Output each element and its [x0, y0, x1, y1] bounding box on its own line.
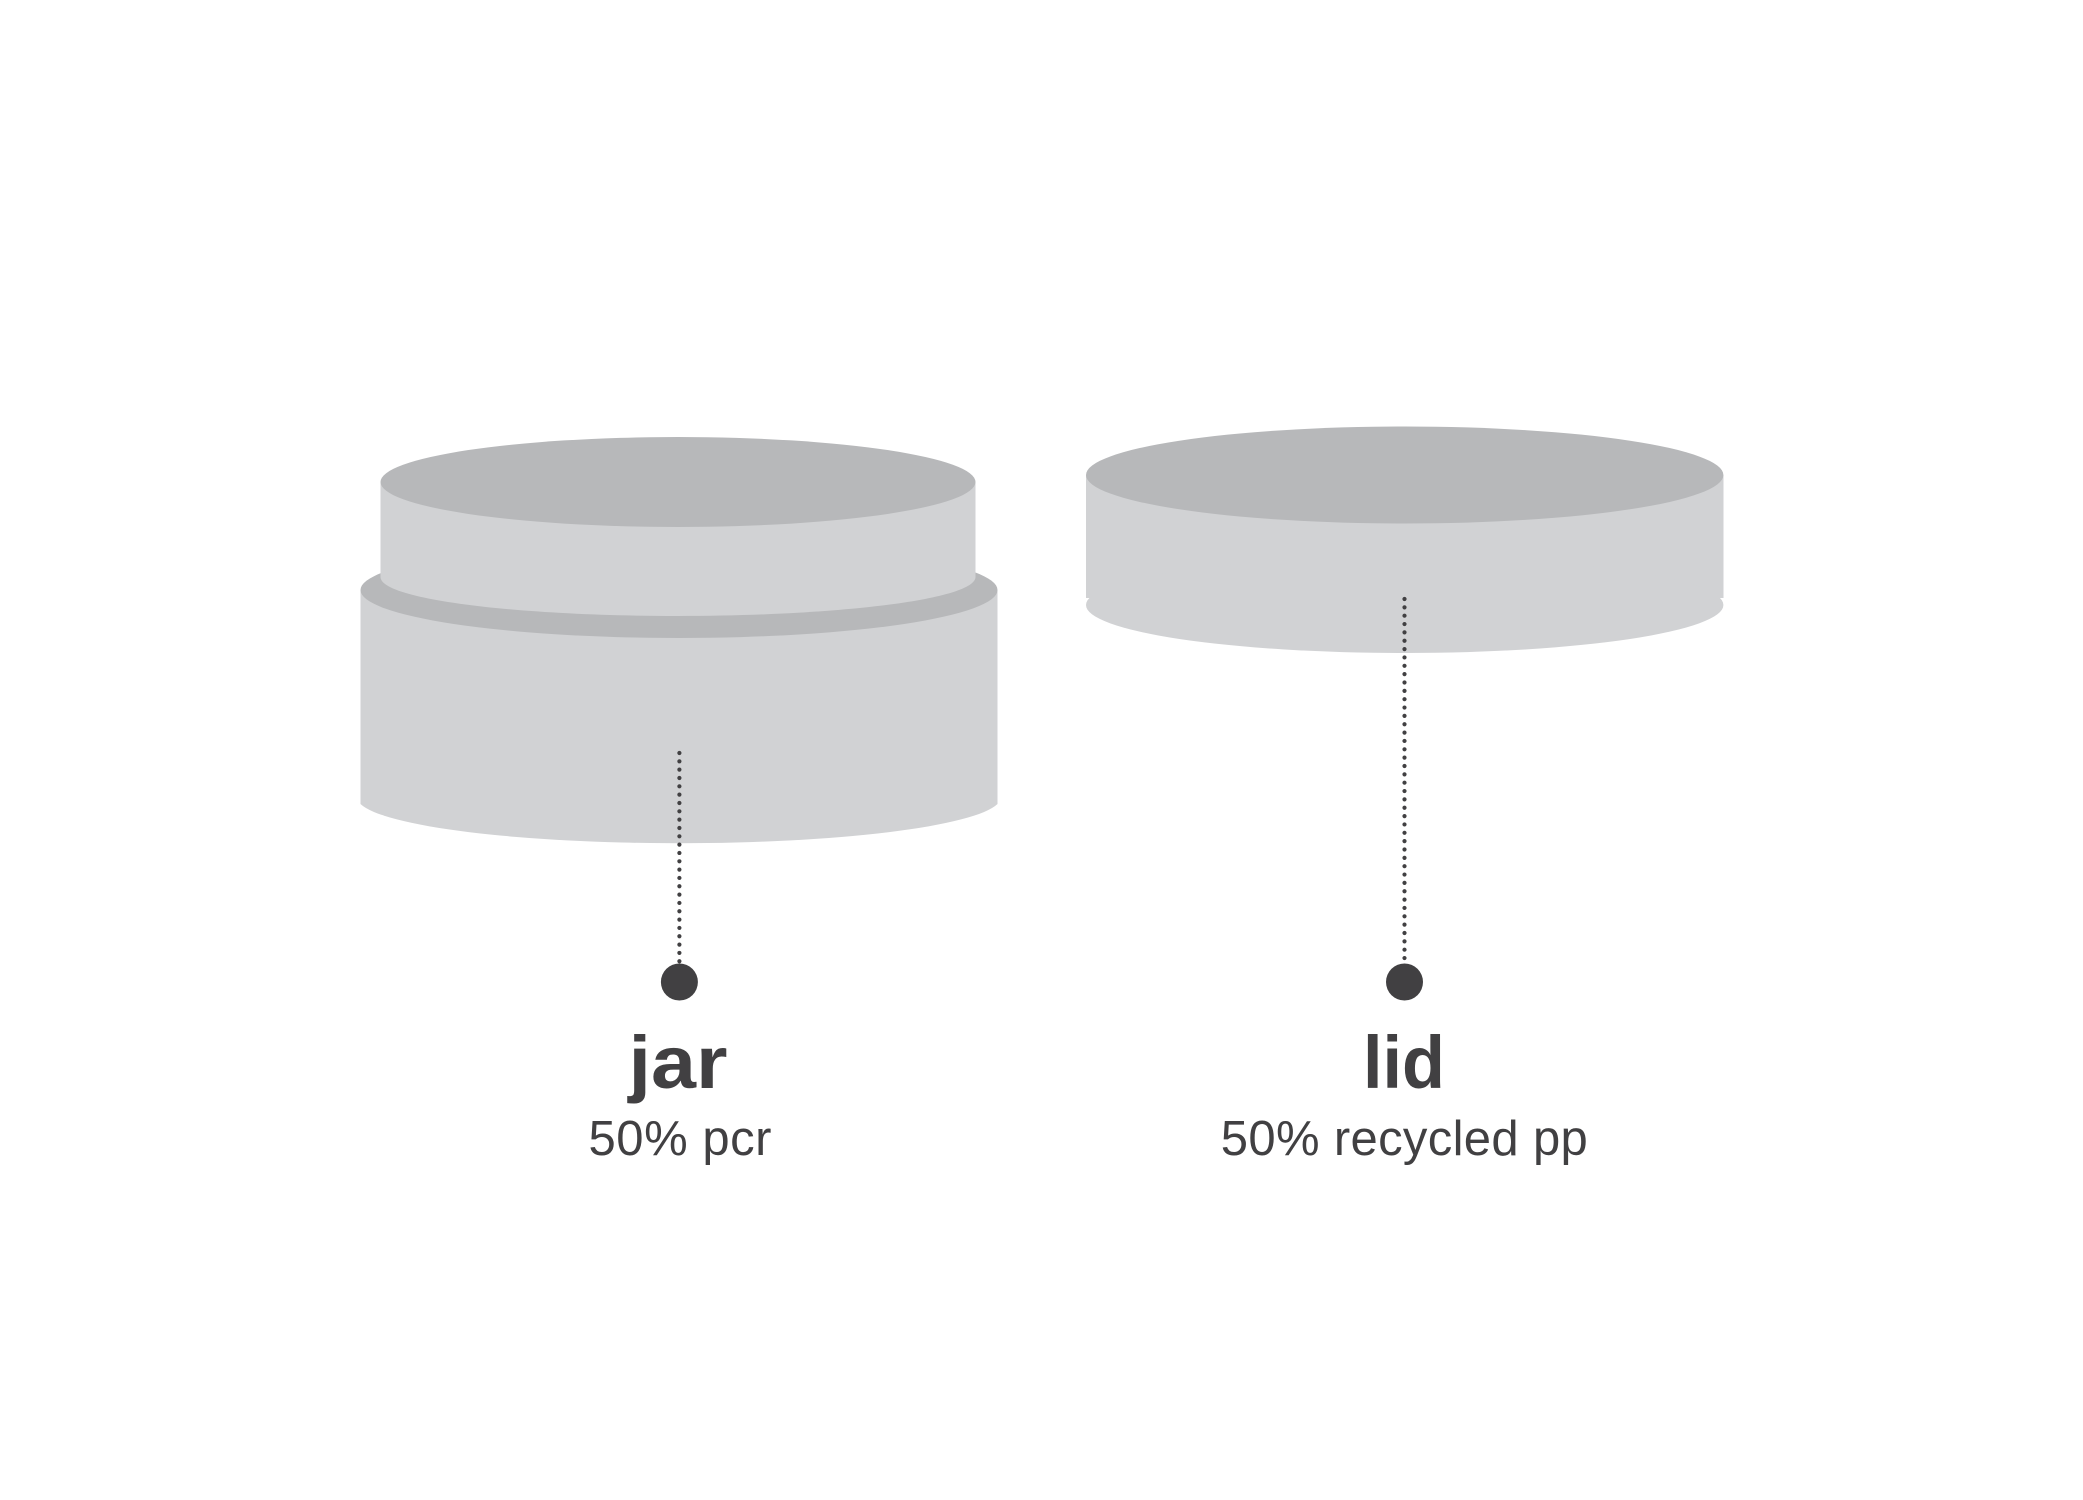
- lid material label: 50% recycled pp: [1221, 1112, 1588, 1166]
- jar base: [360, 542, 998, 843]
- lid marker dot: [1386, 964, 1423, 1000]
- jar neck: [380, 437, 976, 616]
- jar leader line: [677, 753, 682, 962]
- panel: jar: [360, 437, 998, 1166]
- jar heading: jar: [626, 1021, 728, 1104]
- lid body: [1086, 426, 1724, 653]
- jar material label: 50% pcr: [588, 1112, 772, 1166]
- panel: lid: [1086, 426, 1724, 1166]
- jar marker dot: [661, 964, 698, 1000]
- lid leader line: [1402, 599, 1407, 962]
- lid heading: lid: [1363, 1021, 1445, 1104]
